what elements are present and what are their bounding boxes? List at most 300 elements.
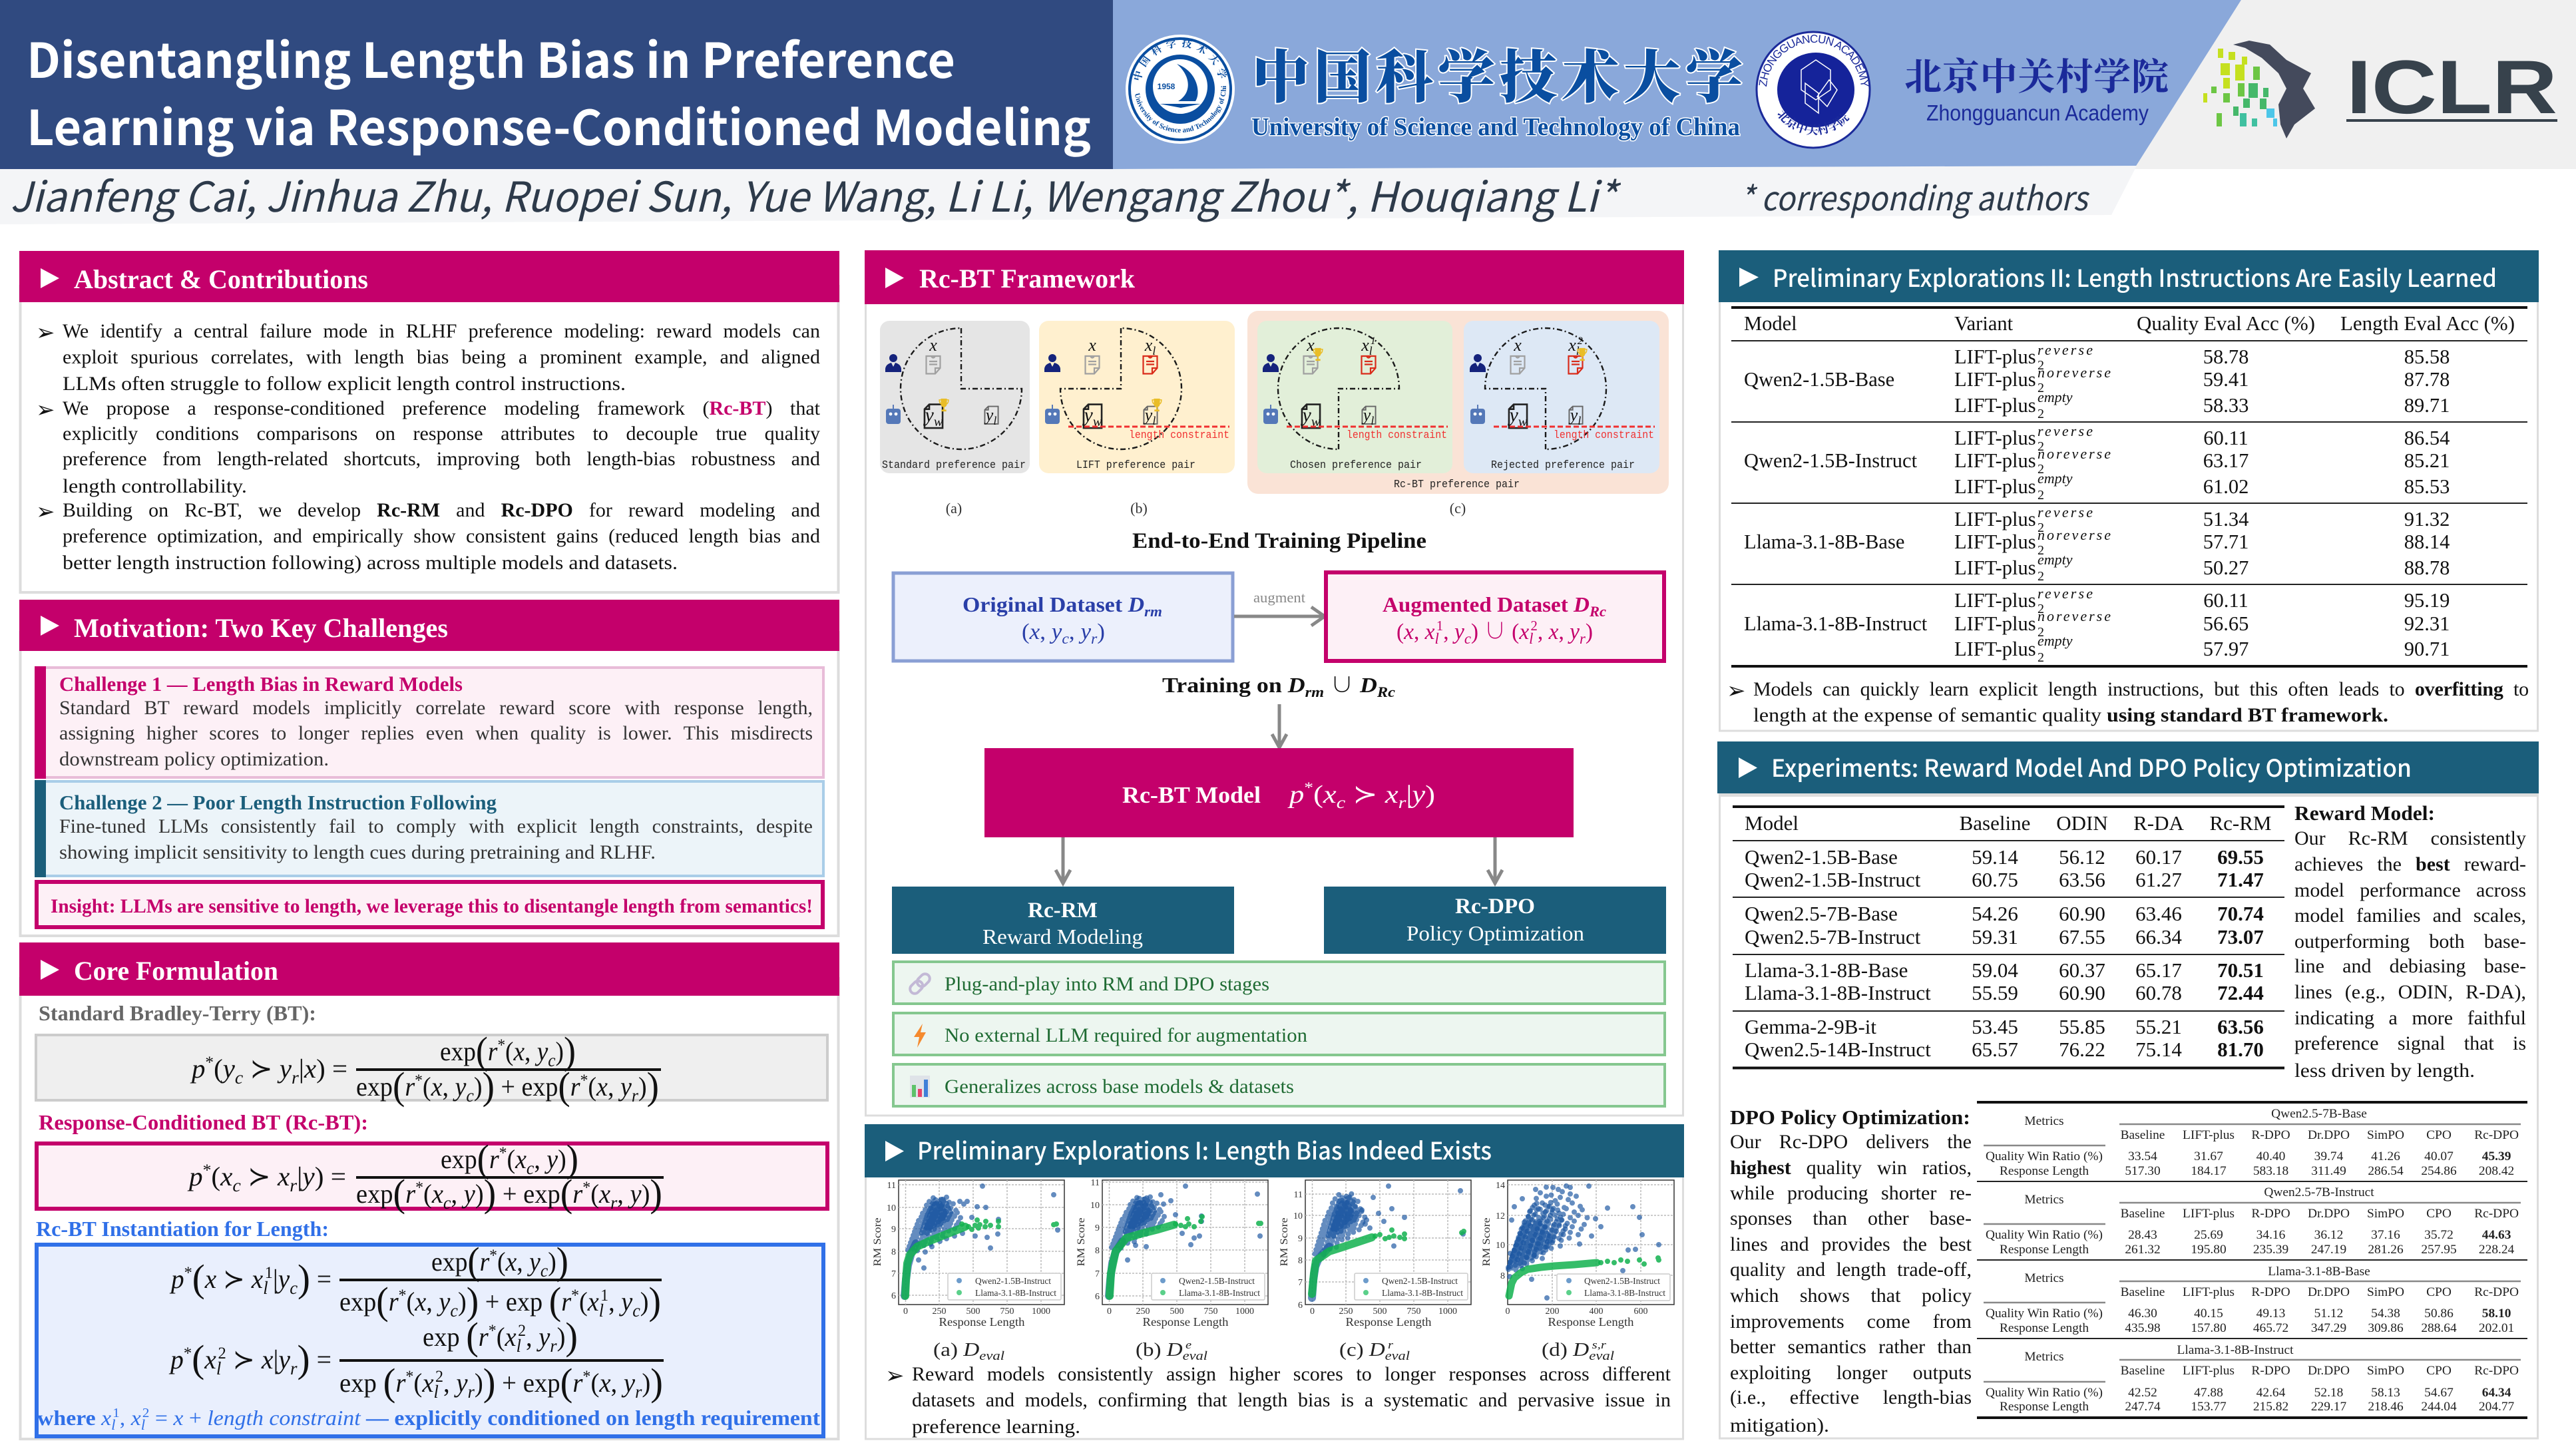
length instruction table: Variant xyxy=(1954,312,2014,335)
reward model table: Model xyxy=(1745,811,1799,835)
length instruction table: 57.71 xyxy=(2203,530,2249,553)
panel: Preliminary Explorations II xyxy=(1719,250,2539,731)
reward model table: Llama-3.1-8B-Base xyxy=(1745,958,1908,982)
benefit: plug and play: Plug-and-play into RM and DPO stages xyxy=(945,973,1269,995)
training label: Training on Drm ∪ DRc xyxy=(1162,673,1395,700)
length instantiation formulas: exp (r*(xl2, yr)) + exp(r*(x, yr)) xyxy=(339,1360,663,1404)
panel: Abstract & Contributions xyxy=(19,251,839,592)
table: Qwen2.5-7B-Instruct: Baseline xyxy=(2121,1207,2165,1221)
length instruction table: 57.97 xyxy=(2203,638,2249,660)
length instruction table: 90.71 xyxy=(2404,638,2450,660)
heading bar xyxy=(19,251,839,302)
length instruction table: empty xyxy=(2038,551,2073,568)
table: Llama-3.1-8B-Base: 157.80 xyxy=(2191,1321,2227,1335)
table: Qwen2.5-7B-Instruct: 25.69 xyxy=(2194,1228,2223,1242)
reward model table: ODIN xyxy=(2056,811,2108,835)
table: Qwen2.5-7B-Base: 184.17 xyxy=(2191,1164,2227,1178)
table: Llama-3.1-8B-Base xyxy=(1977,1265,2527,1339)
scatter chart b: 6 xyxy=(1095,1292,1100,1302)
scatter chart d: 600 xyxy=(1633,1307,1648,1317)
length instruction table: 58.78 xyxy=(2203,345,2249,368)
table: Llama-3.1-8B-Base: 50.86 xyxy=(2424,1307,2454,1321)
scatter chart c: 8 xyxy=(1298,1256,1303,1266)
table: Llama-3.1-8B-Instruct: Dr.DPO xyxy=(2308,1364,2350,1378)
logo: ICLR wordmark: ICLR xyxy=(2346,45,2557,130)
length instruction table: reverse xyxy=(2038,341,2093,358)
table: Llama-3.1-8B-Instruct: 52.18 xyxy=(2314,1386,2343,1400)
reward model table: 60.78 xyxy=(2135,981,2182,1004)
contribution bullets: We identify a central failure mode in RLHF preference modeling: reward models can xyxy=(63,320,820,342)
scatter chart b: 0 xyxy=(1107,1307,1112,1317)
scatter chart c: 500 xyxy=(1373,1307,1387,1317)
scatter chart a: Response Length xyxy=(939,1315,1025,1329)
scatter chart b: 500 xyxy=(1170,1307,1183,1317)
figure: preference pair comparison xyxy=(880,311,1669,517)
logo: Zhongguancun Academy seal xyxy=(1756,31,1870,149)
overfitting takeaway: ➢ xyxy=(1727,678,1745,704)
table: Qwen2.5-7B-Base: 31.67 xyxy=(2194,1149,2223,1163)
length instruction table: 2 xyxy=(2038,543,2044,558)
sub-figure b: LIFT preference pair xyxy=(1039,321,1235,473)
reward model table: 65.57 xyxy=(1972,1038,2018,1061)
table: Qwen2.5-7B-Base xyxy=(1977,1107,2527,1181)
contribution bullets: ➢ xyxy=(36,319,55,346)
table: Llama-3.1-8B-Base: CPO xyxy=(2426,1285,2452,1299)
scatter chart c xyxy=(1279,1180,1471,1329)
contribution bullets: preference optimization, and empirically show consistent gains (reduced length bias and xyxy=(63,525,820,547)
table: Llama-3.1-8B-Base: 54.38 xyxy=(2371,1307,2400,1321)
table: Qwen2.5-7B-Instruct: Response Length xyxy=(2000,1243,2089,1257)
heading bar xyxy=(19,600,839,651)
DPO text: which shows that policy xyxy=(1730,1285,1972,1307)
scatter chart d: RM Score xyxy=(1481,1218,1492,1266)
table: Llama-3.1-8B-Instruct: Metrics xyxy=(2024,1350,2064,1364)
insight callout: Insight: LLMs are sensitive to length, we leverage this to disentangle length from semantics! xyxy=(51,895,813,917)
scatter chart d xyxy=(1481,1180,1674,1329)
scatter chart d: 12 xyxy=(1496,1211,1505,1221)
box: Rc-BT model xyxy=(984,748,1574,837)
arrow: augment xyxy=(1234,589,1325,626)
Rc-BT formula xyxy=(37,1137,827,1215)
DPO tables xyxy=(1977,1102,2527,1418)
scatter chart b: Response Length xyxy=(1142,1315,1229,1329)
standard BT formula: exp(r*(x, yc)) xyxy=(440,1029,576,1072)
length instruction table: noreverse xyxy=(2038,445,2111,462)
reward model table: 66.34 xyxy=(2135,925,2182,948)
length instantiation formulas: exp(r*(x, yc)) + exp (r*(xl1, yc)) xyxy=(339,1279,661,1323)
length instruction table: noreverse xyxy=(2038,608,2111,624)
reward model table: 70.74 xyxy=(2217,902,2264,925)
reward model table: 63.56 xyxy=(2059,868,2105,891)
length instruction table: LIFT-plus xyxy=(1954,427,2036,449)
scatter chart c: Llama-3.1-8B-Instruct xyxy=(1382,1289,1463,1299)
sub-figure c: Rc-BT preference pairs: Rc-BT preference pair xyxy=(1394,479,1520,491)
table: Qwen2.5-7B-Base: R-DPO xyxy=(2251,1128,2290,1142)
reward model table: 61.27 xyxy=(2135,868,2182,891)
reward model table: 56.12 xyxy=(2059,845,2105,869)
arrow: model to Rc-DPO xyxy=(1488,837,1502,883)
table: Llama-3.1-8B-Base: Dr.DPO xyxy=(2308,1285,2350,1299)
length instruction table: Length Eval Acc (%) xyxy=(2340,312,2515,335)
reward model table: 60.17 xyxy=(2135,845,2182,869)
length instruction table: 63.17 xyxy=(2203,449,2249,472)
reward model text xyxy=(2294,801,2526,1082)
length instruction table: LIFT-plus xyxy=(1954,368,2036,391)
overfitting takeaway xyxy=(1727,677,2529,726)
DPO text: better semantics rather than xyxy=(1730,1336,1972,1358)
reward model text: achieves the best reward- xyxy=(2294,853,2526,875)
length instruction table: 2 xyxy=(2038,625,2044,640)
DPO text: (i.e., effective length-bias xyxy=(1730,1386,1972,1408)
table: Llama-3.1-8B-Instruct: 215.82 xyxy=(2253,1400,2288,1414)
length instruction table: Qwen2-1.5B-Base xyxy=(1744,368,1894,391)
arrow: training to model xyxy=(1272,704,1287,747)
heading bar: Abstract & Contributions xyxy=(74,264,368,294)
figure: preference pair comparison: (c) xyxy=(1450,500,1466,517)
header: ICLR gray corner xyxy=(2134,0,2576,169)
length instruction table: Llama-3.1-8B-Instruct xyxy=(1744,612,1928,635)
sub-figure a: standard preference pair xyxy=(880,321,1030,473)
scatter chart b: Qwen2-1.5B-Instruct xyxy=(1179,1277,1255,1287)
heading bar: Motivation: Two Key Challenges xyxy=(74,613,448,643)
length instruction table: 51.34 xyxy=(2203,508,2249,530)
reward model table: Gemma-2-9B-it xyxy=(1745,1015,1876,1038)
corresponding authors note: * corresponding authors xyxy=(1740,172,2090,220)
sub-figure a: standard preference pair: yl xyxy=(984,405,996,427)
table: Llama-3.1-8B-Base: 202.01 xyxy=(2479,1321,2514,1335)
table: Qwen2.5-7B-Instruct: 35.72 xyxy=(2424,1228,2454,1242)
table: Qwen2.5-7B-Base: Dr.DPO xyxy=(2308,1128,2350,1142)
scatter chart d: 8 xyxy=(1500,1271,1505,1281)
DPO text: highest quality win ratios, xyxy=(1730,1157,1972,1179)
length instruction table: LIFT-plus xyxy=(1954,556,2036,579)
scatter chart c: RM Score xyxy=(1279,1218,1290,1266)
scatter chart a: 500 xyxy=(966,1307,980,1317)
scatter chart a: 250 xyxy=(932,1307,947,1317)
logo: USTC wordmark: University of Science and Technology of China xyxy=(1251,113,1740,141)
length instantiation formulas xyxy=(37,1239,823,1436)
reward model table: Qwen2.5-14B-Instruct xyxy=(1745,1038,1931,1061)
table: Llama-3.1-8B-Base: 46.30 xyxy=(2128,1307,2157,1321)
benefit: plug and play xyxy=(893,962,1665,1004)
length instruction table: noreverse xyxy=(2038,526,2111,543)
benefit: generalizes xyxy=(893,1064,1665,1106)
length instruction table: empty xyxy=(2038,632,2073,649)
table: Llama-3.1-8B-Instruct: CPO xyxy=(2426,1364,2452,1378)
scatter chart a: 10 xyxy=(887,1203,896,1213)
contribution bullets xyxy=(36,319,820,574)
heading bar: Preliminary Explorations I: Length Bias Indeed Exists xyxy=(917,1132,1492,1167)
table: Qwen2.5-7B-Instruct: 37.16 xyxy=(2371,1228,2400,1242)
length instantiation formulas: p*(x ≻ xl1|yc) = xyxy=(169,1257,331,1300)
scatter chart a: 9 xyxy=(891,1225,896,1235)
table: Qwen2.5-7B-Instruct: 228.24 xyxy=(2479,1243,2515,1257)
reward model text: outperforming both base- xyxy=(2294,931,2526,952)
length instantiation formulas: exp(r*(x, yc)) xyxy=(431,1239,568,1283)
scatter chart b: RM Score xyxy=(1076,1218,1087,1266)
sub-figure a: standard preference pair: Standard preference pair xyxy=(882,459,1026,472)
length instruction table: reverse xyxy=(2038,585,2093,602)
reward model table: 76.22 xyxy=(2059,1038,2105,1061)
scatter chart a: 1000 xyxy=(1032,1307,1050,1317)
length instruction table: 2 xyxy=(2038,569,2044,584)
scatter chart a: 11 xyxy=(887,1181,896,1191)
scatter chart b: 1000 xyxy=(1235,1307,1254,1317)
heading bar xyxy=(865,1124,1684,1177)
scatter chart c: 0 xyxy=(1310,1307,1315,1317)
contribution bullets: We propose a response-conditioned preference modeling framework (Rc-BT) that xyxy=(63,397,820,419)
sub-figure b: LIFT preference pair: xl xyxy=(1144,335,1156,357)
length instruction table: LIFT-plus xyxy=(1954,508,2036,530)
table: Qwen2.5-7B-Base: Baseline xyxy=(2121,1128,2165,1142)
box: Rc-DPO xyxy=(1324,887,1666,954)
length bias takeaway: ➢ xyxy=(885,1362,904,1389)
table: Qwen2.5-7B-Base: CPO xyxy=(2426,1128,2452,1142)
box: Rc-RM xyxy=(892,887,1234,954)
table: Llama-3.1-8B-Instruct: R-DPO xyxy=(2251,1364,2290,1378)
length instruction table: 2 xyxy=(2038,602,2044,616)
table: Qwen2.5-7B-Instruct: Rc-DPO xyxy=(2474,1207,2519,1221)
chosen pair: yl xyxy=(1361,405,1374,427)
chosen pair: yw xyxy=(1301,404,1321,429)
heading bar: Core Formulation xyxy=(74,956,278,986)
benefit: no external LLM: No external LLM required for augmentation xyxy=(945,1024,1307,1046)
table: Qwen2.5-7B-Base: 208.42 xyxy=(2479,1164,2514,1178)
challenge 2 card: Fine-tuned LLMs consistently fail to comply with explicit length constraints, despite xyxy=(59,815,813,837)
pipeline title: End-to-End Training Pipeline xyxy=(1132,529,1426,553)
author names: Jianfeng Cai, Jinhua Zhu, Ruopei Sun, Yue Wang, Li Li, Wengang Zhou*, Houqiang Li* xyxy=(10,164,1621,224)
reward model table: 60.75 xyxy=(1972,868,2018,891)
length instantiation formulas: p*(xl2 ≻ x|yr) = xyxy=(168,1337,331,1380)
length bias takeaway: datasets and models, confirming that length bias is a systematic and pervasive issue in xyxy=(912,1389,1671,1411)
length instruction table: 2 xyxy=(2038,439,2044,454)
rejected pair xyxy=(1464,321,1659,473)
table: Qwen2.5-7B-Base: 40.07 xyxy=(2424,1149,2454,1163)
reward model text: model families and scales, xyxy=(2294,905,2526,927)
contribution bullets: exploit spurious correlates, with length bias being a prominent example, and aligned xyxy=(63,346,820,368)
table: Qwen2.5-7B-Instruct: Dr.DPO xyxy=(2308,1207,2350,1221)
length instruction table: Model xyxy=(1744,312,1797,335)
table: Qwen2.5-7B-Instruct: 235.39 xyxy=(2253,1243,2288,1257)
scatter chart a: 750 xyxy=(1000,1307,1014,1317)
length instruction table: 85.58 xyxy=(2404,345,2450,368)
arrow: model to Rc-RM xyxy=(1056,837,1070,883)
table: Llama-3.1-8B-Base: SimPO xyxy=(2367,1285,2404,1299)
DPO text: sponses than other base- xyxy=(1730,1207,1972,1229)
scatter chart d: Llama-3.1-8B-Instruct xyxy=(1584,1289,1665,1299)
table: Qwen2.5-7B-Base: 33.54 xyxy=(2128,1149,2157,1163)
reward model text: lines (e.g., ODIN, R-DA), xyxy=(2294,981,2526,1003)
box: original dataset: (x, yc, yr) xyxy=(1022,620,1105,648)
length instruction table: LIFT-plus xyxy=(1954,612,2036,635)
scatter chart c: 9 xyxy=(1298,1234,1303,1244)
reward model table: 81.70 xyxy=(2217,1038,2264,1061)
length instruction table: reverse xyxy=(2038,504,2093,520)
length instruction table: 2 xyxy=(2038,520,2044,535)
length instruction table: 92.31 xyxy=(2404,612,2450,635)
table: Qwen2.5-7B-Instruct: LIFT-plus xyxy=(2183,1207,2235,1221)
sub-figure a: standard preference pair: yw xyxy=(923,404,943,429)
arrow: augment: augment xyxy=(1253,589,1305,606)
table: Llama-3.1-8B-Base: Rc-DPO xyxy=(2474,1285,2519,1299)
heading bar: Rc-BT Framework xyxy=(919,264,1136,294)
heading bar: Experiments: Reward Model And DPO Policy Optimization xyxy=(1771,749,2412,784)
reward model table: 60.90 xyxy=(2059,902,2105,925)
scatter chart c: 7 xyxy=(1298,1278,1303,1288)
table: Qwen2.5-7B-Base: 40.40 xyxy=(2256,1149,2285,1163)
reward model text: Our Rc-RM consistently xyxy=(2294,827,2526,849)
scatter chart a: 8 xyxy=(891,1247,896,1257)
table: Llama-3.1-8B-Instruct: Quality Win Ratio (%) xyxy=(1986,1386,2103,1400)
chart captions xyxy=(933,1339,1614,1363)
challenge 1 card: Standard BT reward models implicitly correlate reward score with response length, xyxy=(59,697,813,719)
reward model table: Qwen2-1.5B-Instruct xyxy=(1745,868,1921,891)
table: Llama-3.1-8B-Base: 435.98 xyxy=(2125,1321,2161,1335)
rejected pair: yw xyxy=(1508,404,1528,429)
scatter chart a: Qwen2-1.5B-Instruct xyxy=(975,1277,1051,1287)
length instruction table: LIFT-plus xyxy=(1954,449,2036,472)
DPO text: while producing shorter re- xyxy=(1730,1182,1972,1204)
contribution bullets: ➢ xyxy=(36,499,55,525)
length instruction table: Quality Eval Acc (%) xyxy=(2137,312,2315,335)
reward model table: 60.90 xyxy=(2059,981,2105,1004)
challenge 1 card: assigning higher scores to longer replies even when quality is lower. This misdirects xyxy=(59,722,813,744)
DPO text: lines and provides the best xyxy=(1730,1233,1972,1255)
rejected pair: yl xyxy=(1568,405,1581,427)
table: Llama-3.1-8B-Instruct: 58.13 xyxy=(2371,1386,2400,1400)
reward model table: 72.44 xyxy=(2217,981,2264,1004)
reward model table: 69.55 xyxy=(2217,845,2264,869)
table: Llama-3.1-8B-Instruct: 247.74 xyxy=(2125,1400,2161,1414)
scatter chart b: 7 xyxy=(1095,1269,1100,1279)
chart captions: (b) Devale xyxy=(1136,1339,1207,1363)
box: Rc-BT model: Rc-BT Model xyxy=(1122,782,1261,808)
figure: preference pair comparison: (b) xyxy=(1130,500,1148,517)
length instruction table: empty xyxy=(2038,470,2073,487)
reward model table: 55.21 xyxy=(2135,1015,2182,1038)
panel: Preliminary Explorations I xyxy=(865,1124,1684,1439)
standard BT label: Standard Bradley-Terry (BT): xyxy=(39,1001,316,1025)
scatter chart b: 8 xyxy=(1095,1246,1100,1256)
length instruction table: 60.11 xyxy=(2203,427,2249,449)
standard BT formula xyxy=(36,1029,827,1108)
length instruction table: LIFT-plus xyxy=(1954,475,2036,498)
box: Rc-DPO: Rc-DPO xyxy=(1455,895,1535,919)
contribution bullets: ➢ xyxy=(36,397,55,423)
length instruction table: LIFT-plus xyxy=(1954,589,2036,612)
reward model table: 54.26 xyxy=(1972,902,2018,925)
scatter chart d: 0 xyxy=(1506,1307,1510,1317)
table: Llama-3.1-8B-Instruct: 153.77 xyxy=(2191,1400,2227,1414)
panel: Motivation xyxy=(19,600,839,936)
length instruction table xyxy=(1731,308,2527,666)
reward model table: 55.59 xyxy=(1972,981,2018,1004)
title text: Learning via Response-Conditioned Modeling xyxy=(27,89,1091,159)
scatter chart c: 11 xyxy=(1294,1190,1303,1200)
reward model table: Rc-RM xyxy=(2210,811,2271,835)
table: Llama-3.1-8B-Base: 465.72 xyxy=(2253,1321,2288,1335)
box: augmented dataset xyxy=(1326,572,1664,661)
reward model table: 75.14 xyxy=(2135,1038,2182,1061)
box: Rc-DPO: Policy Optimization xyxy=(1406,921,1584,945)
table: Llama-3.1-8B-Base: 309.86 xyxy=(2368,1321,2404,1335)
table: Qwen2.5-7B-Base: Response Length xyxy=(2000,1164,2089,1178)
scatter chart c: 750 xyxy=(1407,1307,1420,1317)
length instruction table: LIFT-plus xyxy=(1954,638,2036,660)
DPO text: exploiting longer outputs xyxy=(1730,1362,1972,1384)
length instruction table: Llama-3.1-8B-Base xyxy=(1744,530,1904,553)
DPO text xyxy=(1730,1106,1972,1436)
table: Qwen2.5-7B-Instruct: 44.63 xyxy=(2482,1228,2511,1242)
DPO text: mitigation). xyxy=(1730,1414,1829,1436)
reward model table: Llama-3.1-8B-Instruct xyxy=(1745,981,1931,1004)
reward model text: indicating a more faithful xyxy=(2294,1007,2526,1029)
reward model table: 70.51 xyxy=(2217,958,2264,982)
length instruction table: 2 xyxy=(2038,407,2044,421)
figure: preference pair comparison: (a) xyxy=(946,500,962,517)
length instruction table: Qwen2-1.5B-Instruct xyxy=(1744,449,1918,472)
contribution bullets: LLMs often struggle to follow explicit length control instructions. xyxy=(63,373,626,395)
standard BT formula: exp(r*(x, yc)) + exp(r*(x, yr)) xyxy=(356,1064,659,1108)
table: Llama-3.1-8B-Instruct: 218.46 xyxy=(2368,1400,2404,1414)
sub-figure b: LIFT preference pair: length constraint xyxy=(1129,429,1229,442)
table: Llama-3.1-8B-Instruct: Rc-DPO xyxy=(2474,1364,2519,1378)
logo: Zhongguancun Academy seal: ZHONGGUANCUN ACADEMY xyxy=(1759,35,1869,87)
table: Llama-3.1-8B-Instruct: 42.64 xyxy=(2256,1386,2286,1400)
contribution bullets: better length instruction following) across multiple models and datasets. xyxy=(63,552,678,574)
chosen pair: x xyxy=(1306,335,1315,355)
challenge 1 card: Challenge 1 — Length Bias in Reward Models xyxy=(59,672,463,696)
table: Llama-3.1-8B-Instruct: 54.67 xyxy=(2424,1386,2454,1400)
logo: Zhongguancun Academy seal: 北京中关村学院 xyxy=(1777,110,1849,136)
scatter chart b: 250 xyxy=(1136,1307,1150,1317)
length instruction table: 87.78 xyxy=(2404,368,2450,391)
length instruction table: noreverse xyxy=(2038,364,2111,381)
reward model table: 60.37 xyxy=(2059,958,2105,982)
standard BT formula: p*(yc ≻ yr|x) = xyxy=(190,1054,347,1088)
table: Qwen2.5-7B-Base: Metrics xyxy=(2024,1114,2064,1128)
Rc-BT formula: exp(r*(xc, y)) + exp(r*(xr, y)) xyxy=(356,1171,662,1215)
table: Llama-3.1-8B-Base: LIFT-plus xyxy=(2183,1285,2235,1299)
logo: Zhongguancun wordmark: 北京中关村学院 xyxy=(1904,48,2169,101)
length instruction table: 2 xyxy=(2038,462,2044,477)
table: Llama-3.1-8B-Instruct: 229.17 xyxy=(2311,1400,2346,1414)
table: Qwen2.5-7B-Instruct: 281.26 xyxy=(2368,1243,2404,1257)
heading bar xyxy=(1717,741,2539,793)
table: Llama-3.1-8B-Instruct: 204.77 xyxy=(2479,1400,2515,1414)
panel: Experiments xyxy=(1717,741,2539,1438)
table: Llama-3.1-8B-Base: Llama-3.1-8B-Base xyxy=(2268,1265,2370,1279)
table: Qwen2.5-7B-Instruct: 261.32 xyxy=(2125,1243,2161,1257)
table: Llama-3.1-8B-Instruct: 244.04 xyxy=(2421,1400,2457,1414)
table: Qwen2.5-7B-Base: 39.74 xyxy=(2314,1149,2344,1163)
box: Rc-RM: Reward Modeling xyxy=(982,925,1143,948)
table: Qwen2.5-7B-Base: 583.18 xyxy=(2253,1164,2288,1178)
reward model table xyxy=(1733,807,2284,1068)
sub-figure a: standard preference pair: x xyxy=(929,335,937,355)
rejected pair: xl2 xyxy=(1568,335,1583,357)
contribution bullets: preference from length-related shortcuts, improving both length-bias robustness and xyxy=(63,448,820,470)
reward model table: 65.17 xyxy=(2135,958,2182,982)
table: Llama-3.1-8B-Instruct: 47.88 xyxy=(2194,1386,2223,1400)
scatter chart d: Qwen2-1.5B-Instruct xyxy=(1584,1277,1660,1287)
chosen pair xyxy=(1257,321,1452,473)
logo: USTC seal xyxy=(1126,35,1235,144)
length instantiation formulas: where xl1, xl2 = x + length constraint — explicitly conditioned on length requirement xyxy=(37,1406,820,1433)
scatter chart c: 6 xyxy=(1298,1301,1303,1311)
length instruction table: reverse xyxy=(2038,423,2093,439)
length instruction table: 56.65 xyxy=(2203,612,2249,635)
